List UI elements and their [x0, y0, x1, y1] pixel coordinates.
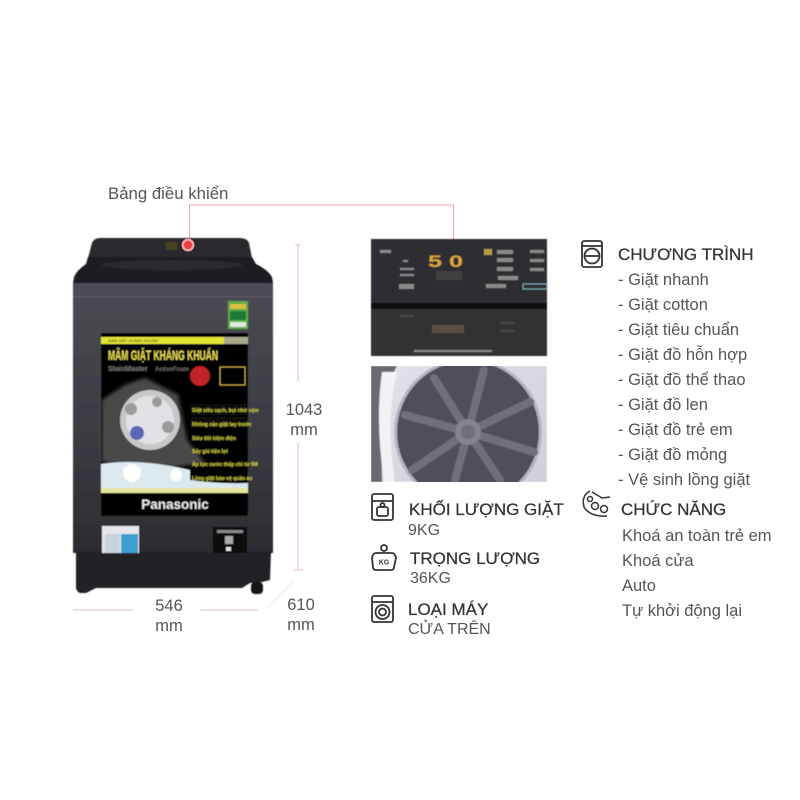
- icon: KG weight: KG: [379, 560, 390, 566]
- washing machine photo: [73, 238, 273, 594]
- product poster: ActiveFoam: [155, 367, 189, 373]
- feature bars: Không cần giặt tay trước: [192, 422, 252, 428]
- feature bars: [190, 404, 259, 482]
- width dimension: [73, 597, 258, 635]
- poster headline: MÂM GIẶT KHÁNG KHUẨN: [108, 346, 218, 363]
- control panel top: [88, 238, 252, 258]
- feature bars: Lồng giặt bảo vệ quần áo: [192, 476, 252, 482]
- black info sticker: [213, 527, 247, 553]
- height dimension: 1043: [286, 401, 322, 419]
- functions items: Khoá cửa: [622, 552, 694, 570]
- control panel callout line: [190, 205, 454, 264]
- foot: [251, 582, 263, 594]
- display on control panel: [166, 242, 177, 250]
- width dimension: mm: [155, 617, 183, 635]
- feature bars: Sấy gió tiện lợi: [192, 448, 228, 455]
- programs items: - Giặt tiêu chuẩn: [618, 321, 739, 339]
- functions list: [583, 491, 772, 620]
- programs list: [582, 241, 754, 489]
- foam strip: [101, 462, 248, 488]
- icon: washing machine: [582, 241, 602, 267]
- spec: wash capacity: [372, 494, 564, 539]
- programs items: - Giặt đồ mỏng: [618, 446, 727, 464]
- drum pulsator: [396, 366, 540, 482]
- programs items: - Giặt nhanh: [618, 271, 709, 289]
- icon: washer with weight: [372, 494, 393, 520]
- spec: machine type: [372, 596, 491, 638]
- programs items: [618, 271, 750, 489]
- programs heading: CHƯƠNG TRÌNH: [618, 245, 754, 264]
- functions items: Tự khởi động lại: [622, 602, 742, 620]
- wash drum photo: [371, 366, 547, 482]
- functions heading: CHỨC NĂNG: [621, 500, 726, 519]
- brand: Panasonic: [141, 497, 209, 512]
- depth dimension: mm: [287, 616, 315, 634]
- programs items: - Giặt đồ len: [618, 396, 708, 414]
- cabinet body: [73, 283, 273, 553]
- icon: KG weight: [372, 545, 396, 570]
- height dimension: [286, 245, 322, 570]
- programs items: - Giặt đồ thể thao: [618, 371, 746, 389]
- height dimension: mm: [290, 421, 318, 439]
- programs items: - Giặt đồ trẻ em: [618, 421, 733, 439]
- spec: machine weight: 36KG: [410, 570, 451, 587]
- spec: machine weight: [372, 545, 540, 587]
- energy label: [228, 301, 248, 329]
- programs items: - Giặt đồ hỗn hợp: [618, 345, 747, 364]
- digital display: 5 0: [428, 252, 463, 271]
- feature bars: Áp lực nước thấp chỉ từ 5M: [192, 461, 258, 468]
- red control panel marker: [182, 238, 194, 252]
- product poster: MÂM GIẶT KHÁNG KHUẨN: [108, 338, 158, 343]
- programs items: - Vệ sinh lồng giặt: [618, 471, 750, 489]
- base: [76, 552, 271, 593]
- programs items: - Giặt cotton: [618, 296, 708, 314]
- control panel close-up photo: [371, 239, 547, 356]
- functions items: Auto: [622, 577, 656, 595]
- depth dimension: [267, 582, 315, 634]
- feature bars: Siêu tiết kiệm điện: [192, 435, 236, 442]
- spec: machine weight: TRỌNG LƯỢNG: [410, 549, 540, 568]
- width dimension: 546: [155, 597, 183, 615]
- functions items: Khoá an toàn trẻ em: [622, 527, 772, 545]
- icon: washer front: [372, 596, 393, 622]
- button labels: [380, 249, 544, 289]
- blue sticker: [102, 526, 139, 553]
- product poster: StainMaster: [108, 366, 148, 373]
- feature bars: Giặt siêu sạch, bụi nhờ sậm: [192, 408, 259, 414]
- splash and drum: [102, 378, 205, 470]
- spec: wash capacity: 9KG: [408, 522, 440, 539]
- functions items: [622, 527, 772, 620]
- panel reflection: [400, 315, 514, 333]
- spec: machine type: LOẠI MÁY: [408, 600, 488, 619]
- lid: [73, 257, 273, 283]
- callout label: Bảng điều khiển: [108, 184, 228, 203]
- spec: wash capacity: KHỐI LƯỢNG GIẶT: [409, 499, 564, 519]
- spec: machine type: CỬA TRÊN: [408, 619, 491, 638]
- depth dimension: 610: [287, 596, 315, 614]
- icon: functions palette: [583, 491, 610, 516]
- product poster: [101, 333, 259, 516]
